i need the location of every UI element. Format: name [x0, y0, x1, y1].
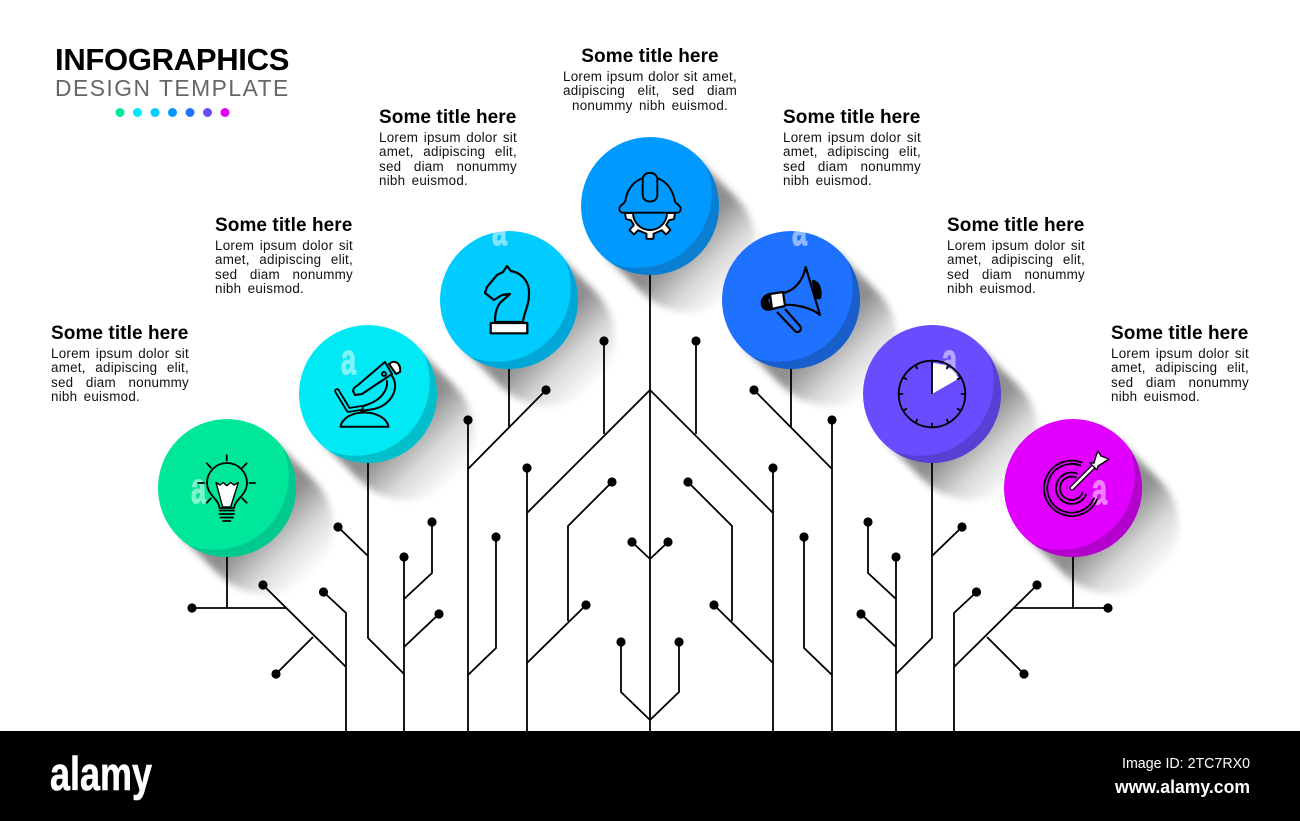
text block 2: Lorem ipsum dolor sit [215, 238, 353, 253]
text block 7: nibh euismod. [1111, 389, 1200, 404]
circle 3: sky blue with chess knight: a [492, 206, 507, 255]
icon: microscope [337, 362, 400, 427]
circle 7: magenta with target [1004, 419, 1142, 557]
text block 3: Lorem ipsum dolor sit [379, 130, 517, 145]
circle 5: royal blue with megaphone [722, 206, 860, 369]
circle 5: royal blue with megaphone: a [792, 206, 807, 255]
text block 5: nibh euismod. [783, 173, 872, 188]
text block 3: Some title here [379, 106, 516, 128]
text block 6: Lorem ipsum dolor sit [947, 238, 1085, 253]
text block 4 [563, 46, 737, 113]
text block 5: Some title here [783, 106, 920, 128]
circle 1: green with lightbulb: a [191, 464, 206, 513]
text block 5: sed diam nonummy [783, 159, 921, 174]
circuit tree: left half [187, 336, 650, 731]
icon: hard hat and gear [619, 173, 681, 239]
circle 1: green with lightbulb [158, 419, 296, 557]
text block 1: sed diam nonummy [51, 375, 189, 390]
title [55, 42, 290, 101]
text block 3: nibh euismod. [379, 173, 468, 188]
circle 6: purple with clock [863, 325, 1001, 463]
text block 7: Lorem ipsum dolor sit [1111, 346, 1249, 361]
text block 6: amet, adipiscing elit, [947, 252, 1085, 267]
text block 2 [215, 214, 353, 296]
text block 1: amet, adipiscing elit, [51, 360, 189, 375]
text block 4: Lorem ipsum dolor sit amet, [563, 69, 737, 84]
icon: chess knight [485, 266, 529, 333]
text block 3 [379, 106, 517, 188]
text block 5 [158, 106, 1086, 648]
icon: lightbulb [198, 455, 255, 521]
text block 5: amet, adipiscing elit, [783, 144, 921, 159]
text block 7: sed diam nonummy [1111, 375, 1249, 390]
text block 6: nibh euismod. [947, 281, 1036, 296]
text block 4: Some title here [581, 46, 719, 66]
footer bar [0, 731, 1300, 821]
circle 2: cyan with microscope: a [341, 335, 356, 384]
circle 2: cyan with microscope [299, 325, 437, 463]
footer text: Image ID: 2TC7RX0 [1122, 755, 1250, 772]
text block 3: sed diam nonummy [379, 159, 517, 174]
text block 1 [51, 322, 189, 404]
text block 7: Some title here [1111, 322, 1248, 344]
footer text: alamy [50, 747, 152, 800]
text block 4: nonummy nibh euismod. [572, 98, 728, 113]
footer text [50, 747, 1250, 800]
footer text: www.alamy.com [1114, 777, 1250, 797]
text block 2: nibh euismod. [215, 281, 304, 296]
circuit trunk: centre line [649, 275, 651, 731]
circle 3: sky blue with chess knight [440, 206, 578, 369]
icon: clock with white wedge [899, 361, 965, 427]
icon: megaphone [762, 267, 821, 332]
circle 4: blue with hard hat and gear [581, 137, 719, 275]
text block 6: Some title here [947, 214, 1084, 236]
circuit tree: right half [650, 336, 1113, 731]
circle 6: purple with clock: a [942, 335, 957, 384]
text block 1: Lorem ipsum dolor sit [51, 346, 189, 361]
text block 2: sed diam nonummy [215, 267, 353, 282]
title: DESIGN TEMPLATE [55, 75, 290, 101]
text block 1: nibh euismod. [51, 389, 140, 404]
text block 6 [947, 214, 1085, 296]
header colour dots [116, 108, 230, 117]
text block 6: sed diam nonummy [947, 267, 1085, 282]
text block 2: Some title here [215, 214, 352, 236]
text block 7 [1111, 322, 1249, 404]
text block 3: amet, adipiscing elit, [379, 144, 517, 159]
text block 4: adipiscing elit, sed diam [563, 83, 737, 98]
circle 7: magenta with target: a [1092, 465, 1107, 514]
title: INFOGRAPHICS [55, 42, 289, 77]
icon: target and dart [1044, 451, 1109, 516]
text block 2: amet, adipiscing elit, [215, 252, 353, 267]
text block 5: Lorem ipsum dolor sit [783, 130, 921, 145]
text block 1: Some title here [51, 322, 188, 344]
text block 7: amet, adipiscing elit, [1111, 360, 1249, 375]
circle shadows [180, 159, 1207, 622]
